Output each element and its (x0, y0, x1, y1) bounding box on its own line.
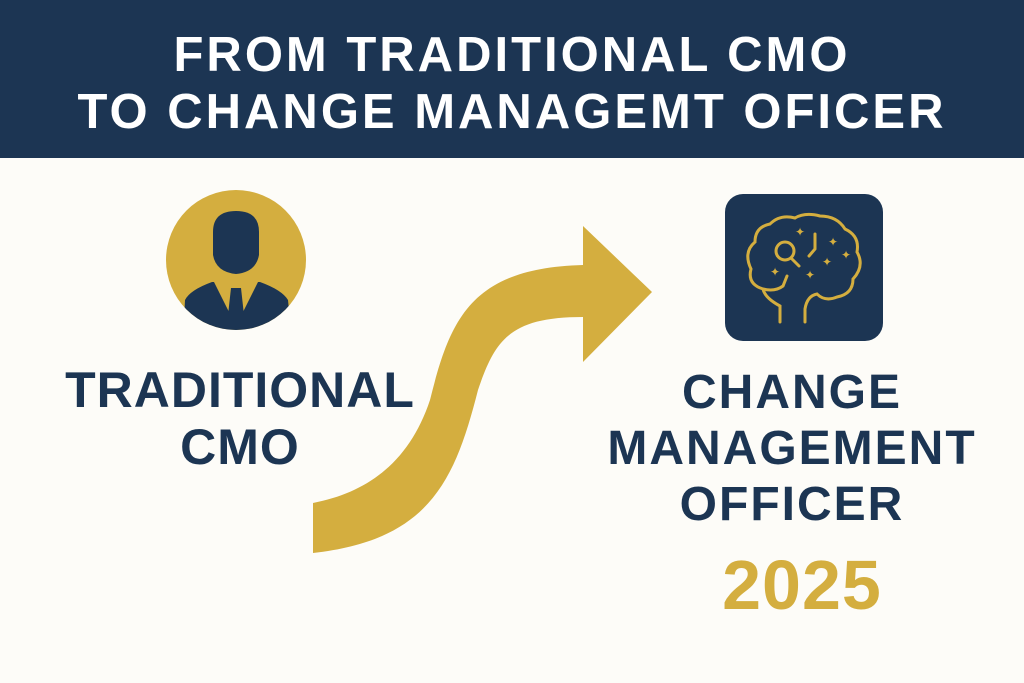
text: change management officer: OFFICER (680, 478, 904, 531)
title: FROM TRADITIONAL CMO (174, 28, 850, 82)
text: 2025: 2025 (722, 546, 882, 624)
title: TO CHANGE MANAGEMT OFICER (78, 85, 946, 139)
text: change management officer (607, 366, 977, 531)
text: traditional cmo (65, 362, 415, 475)
icon: brain: ✦ (805, 268, 815, 282)
title (0, 0, 1024, 158)
icon: brain: ✦ (841, 248, 851, 262)
icon: person (166, 190, 306, 330)
text: change management officer: CHANGE (682, 366, 902, 419)
icon: brain: ✦ (828, 235, 838, 249)
icon: brain: ✦ (770, 265, 780, 279)
text: change management officer: MANAGEMENT (607, 422, 977, 475)
icon: brain: ✦ (795, 225, 805, 239)
text: traditional cmo: CMO (180, 419, 300, 475)
icon: brain: ✦ (822, 255, 832, 269)
icon: brain (725, 194, 883, 341)
text: traditional cmo: TRADITIONAL (65, 362, 415, 418)
